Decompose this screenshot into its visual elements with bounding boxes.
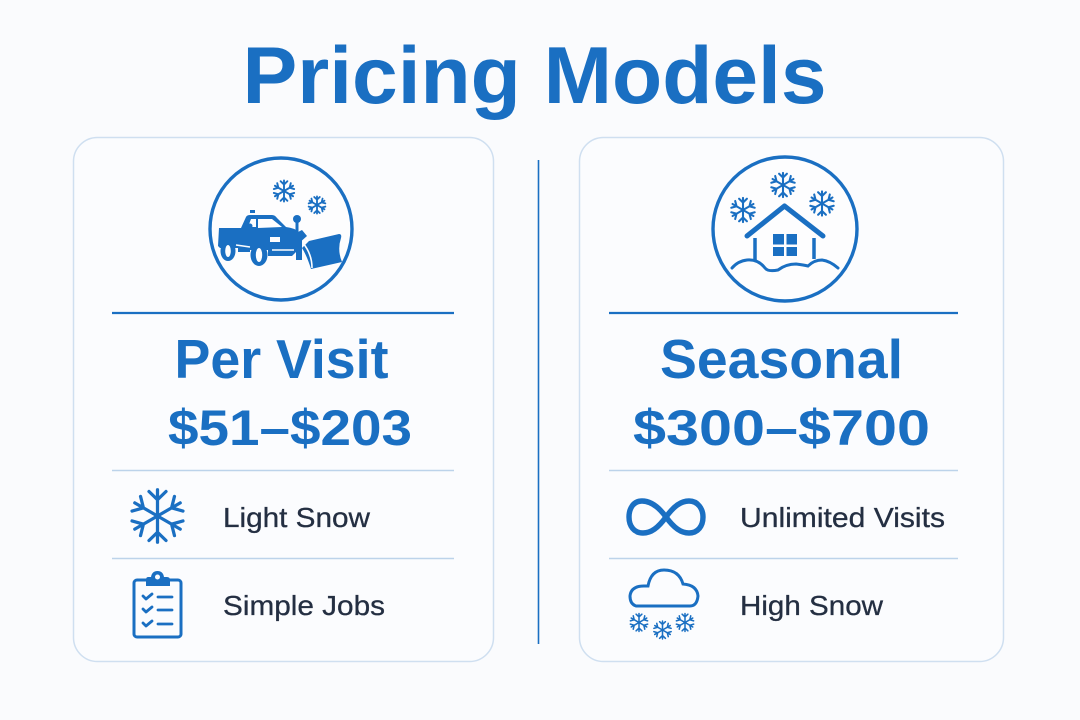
divider — [609, 312, 958, 314]
title: Pricing Models — [242, 31, 826, 121]
divider — [112, 312, 454, 314]
center divider — [538, 160, 540, 644]
heading: per visit: Per Visit — [174, 328, 388, 390]
icon: snow cloud — [630, 570, 698, 639]
icon: snowy house — [713, 157, 857, 301]
icon: snowflake — [131, 490, 184, 542]
label: high snow: High Snow — [740, 590, 884, 621]
label: light snow: Light Snow — [223, 502, 371, 533]
panel: per visit — [74, 138, 494, 662]
price: per visit: $51–$203 — [168, 400, 412, 456]
price: seasonal: $300–$700 — [633, 400, 930, 456]
label: unlimited visits: Unlimited Visits — [740, 502, 945, 533]
icon: clipboard checklist — [134, 571, 181, 637]
panel: seasonal — [580, 138, 1004, 662]
label: simple jobs: Simple Jobs — [223, 590, 385, 621]
heading: seasonal: Seasonal — [660, 328, 903, 390]
icon: snow plow truck — [210, 158, 352, 300]
icon: infinity — [629, 501, 703, 533]
